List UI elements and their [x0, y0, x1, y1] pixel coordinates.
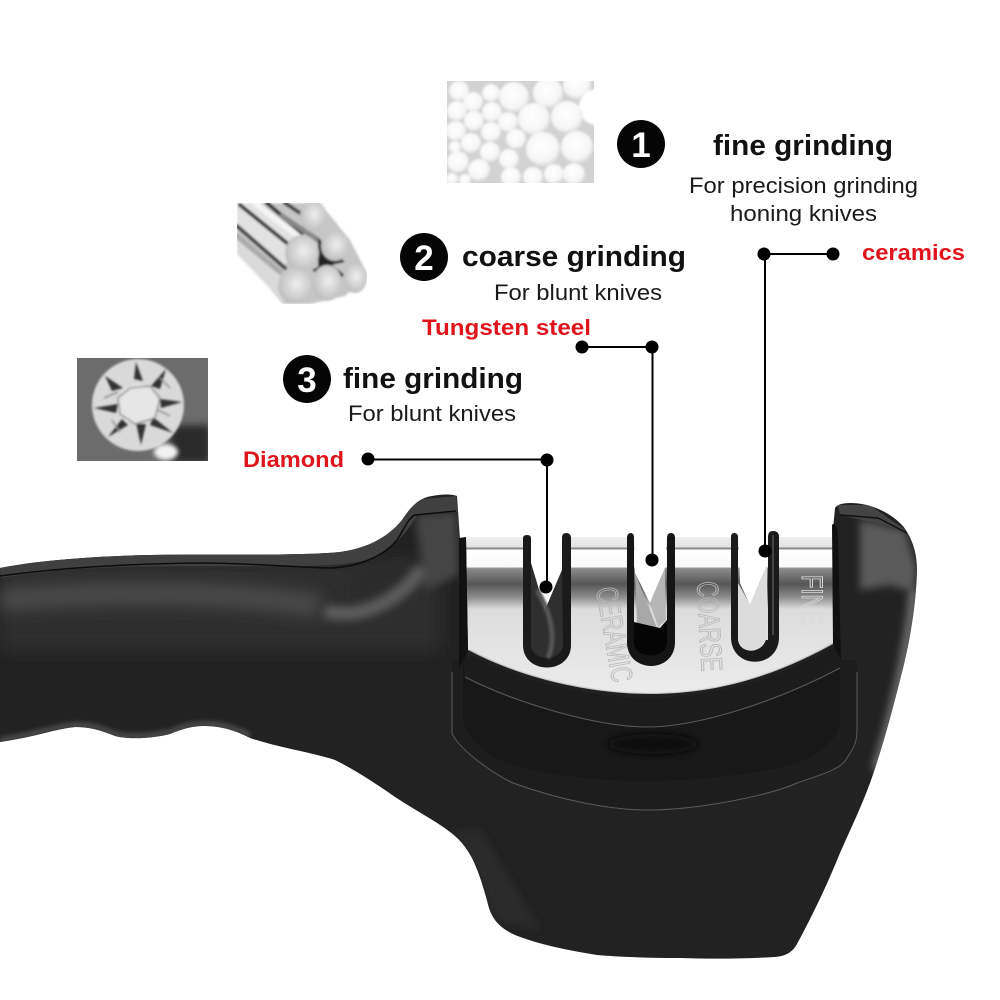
slot 3: ceramic	[731, 530, 779, 662]
leader: diamond	[362, 452, 554, 594]
label: ceramics: ceramics	[862, 240, 965, 265]
badge 3: 3	[297, 361, 317, 400]
recess top band	[463, 640, 840, 727]
outer recess outline	[452, 672, 857, 810]
label: Tungsten steel: Tungsten steel	[422, 315, 591, 340]
side guards	[459, 537, 468, 668]
heading: fine grinding 3: fine grinding	[343, 363, 523, 395]
sharpener illustration	[0, 490, 930, 970]
leader: tungsten steel	[576, 340, 658, 566]
etched labels on steel	[589, 575, 828, 685]
badge 2: 2	[414, 239, 434, 278]
badge 1: 1	[631, 126, 651, 165]
plate lower shadow	[468, 645, 835, 696]
thumb dimple	[608, 734, 698, 754]
heading: coarse grinding: coarse grinding	[462, 241, 686, 273]
handle seam line	[0, 511, 456, 576]
text: for blunt knives 2: For blunt knives	[494, 280, 662, 305]
text: for precision grinding	[689, 173, 918, 226]
slot 1: diamond	[523, 533, 571, 668]
slot 2: tungsten	[627, 531, 675, 666]
inner recess	[463, 655, 840, 781]
etched labels on steel: COARSE	[690, 581, 728, 672]
label: Diamond: Diamond	[243, 447, 344, 472]
etched labels on steel: CERAMIC	[589, 584, 638, 685]
handle and base	[0, 490, 930, 970]
outer recess	[452, 660, 857, 810]
badge 3	[283, 355, 331, 403]
heading: fine grinding 1: fine grinding	[713, 130, 893, 162]
badge 1	[617, 120, 665, 168]
steel plate	[466, 537, 835, 694]
photo: diamond	[77, 358, 210, 463]
photo: ceramic balls	[447, 81, 594, 183]
etched labels on steel: FINE	[795, 575, 828, 625]
recess inner line	[465, 668, 840, 727]
text: for blunt knives 3: For blunt knives	[348, 401, 516, 426]
photo: tungsten steel rods	[237, 200, 368, 304]
text: for precision grinding: honing knives	[730, 201, 877, 226]
badge 2	[400, 233, 448, 281]
text: for precision grinding: For precision grinding	[689, 173, 918, 198]
leader: ceramics	[758, 248, 840, 558]
